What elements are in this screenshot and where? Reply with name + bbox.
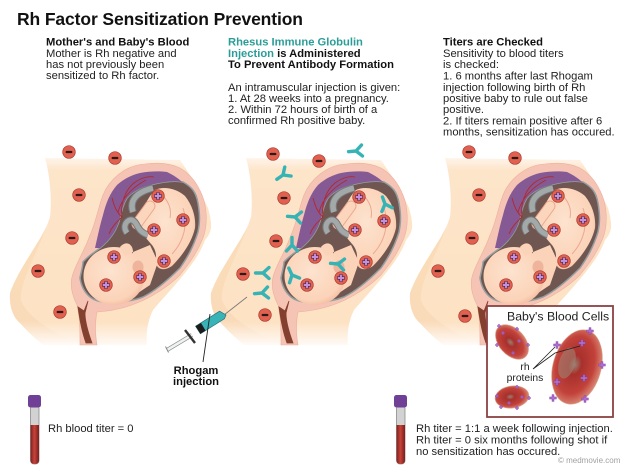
text block: rh titer results: Rh titer = 1:1 a week following injection.	[416, 423, 613, 435]
red blood cell: bottom left	[494, 384, 531, 410]
callout heading: Baby's Blood Cells	[507, 310, 609, 324]
text block: titers are checked: Titers are Checked	[443, 36, 543, 48]
plus markers: baby's blood	[100, 190, 189, 291]
panel: mother before injection	[10, 146, 211, 345]
label: rhogam injection	[173, 365, 219, 388]
text block: rhesus immune globulin injection: confirmed Rh positive baby.	[228, 115, 365, 127]
text block: titers are checked: 1. 6 months after last Rhogam	[443, 70, 593, 82]
text block: titers are checked: injection following birth of Rh	[443, 82, 585, 94]
leader line: rhogam	[203, 314, 210, 362]
label: rhogam injection: Rhogam	[174, 365, 218, 377]
text block: rhesus immune globulin injection: To Prevent Antibody Formation	[228, 59, 394, 71]
text block: rhesus immune globulin injection: An intramuscular injection is given:	[228, 82, 400, 94]
label: rh blood titer: Rh blood titer = 0	[48, 423, 134, 435]
text block: rhesus immune globulin injection: 1. At 28 weeks into a pregnancy.	[228, 93, 389, 105]
text block: titers are checked: positive.	[443, 104, 484, 116]
text block: rhesus immune globulin injection	[228, 36, 400, 127]
text block: titers are checked: positive baby to rule out false	[443, 93, 588, 105]
plus markers: baby's blood	[500, 190, 589, 291]
text block: rhesus immune globulin injection: Rhesus Immune Globulin	[228, 36, 363, 48]
text block: titers are checked	[443, 36, 615, 138]
syringe	[166, 297, 247, 352]
label: rhogam injection: injection	[173, 376, 219, 388]
minus markers: mother's blood	[32, 146, 121, 318]
text block: titers are checked: months, sensitization has occured.	[443, 126, 615, 138]
text block: rh titer results	[416, 423, 613, 458]
test tube: after	[394, 395, 407, 464]
label: rh proteins: proteins	[507, 373, 543, 384]
panel: mother with injection	[211, 145, 412, 345]
label: rh proteins: rh	[520, 362, 530, 373]
text block: titers are checked: is checked:	[443, 59, 499, 71]
text block: mother and baby's blood: sensitized to Rh factor.	[46, 70, 159, 82]
leader lines: rh proteins	[533, 346, 580, 369]
red blood cell: top left	[489, 318, 535, 366]
text block: mother and baby's blood: Mother's and Baby's Blood	[46, 36, 189, 48]
text block: titers are checked: Sensitivity to blood titers	[443, 48, 564, 60]
red blood cell: large	[543, 324, 611, 410]
text block: rh titer results: no sensitization has occured.	[416, 446, 560, 458]
text block: mother and baby's blood: Mother is Rh negative and	[46, 48, 177, 60]
test tube: before	[28, 395, 41, 464]
text block: titers are checked: 2. If titers remain positive after 6	[443, 116, 602, 128]
title: Rh Factor Sensitization Prevention	[17, 9, 303, 29]
text block: rh titer results: Rh titer = 0 six months following shot if	[416, 434, 608, 446]
credit: © medmovie.com	[558, 456, 621, 465]
callout: baby's blood cells	[487, 306, 613, 417]
label: rh proteins	[507, 362, 543, 384]
text block: rhesus immune globulin injection: Injection is Administered	[228, 48, 361, 60]
text block: mother and baby's blood: has not previously been	[46, 59, 164, 71]
panel: mother after titers	[410, 146, 611, 345]
plus markers: baby's blood	[301, 191, 390, 291]
text block: mother and baby's blood	[46, 36, 189, 82]
minus markers: mother's blood	[432, 146, 521, 322]
antibodies	[254, 145, 392, 299]
text block: rhesus immune globulin injection: 2. Within 72 hours of birth of a	[228, 104, 378, 116]
minus markers: mother's blood	[237, 148, 325, 321]
